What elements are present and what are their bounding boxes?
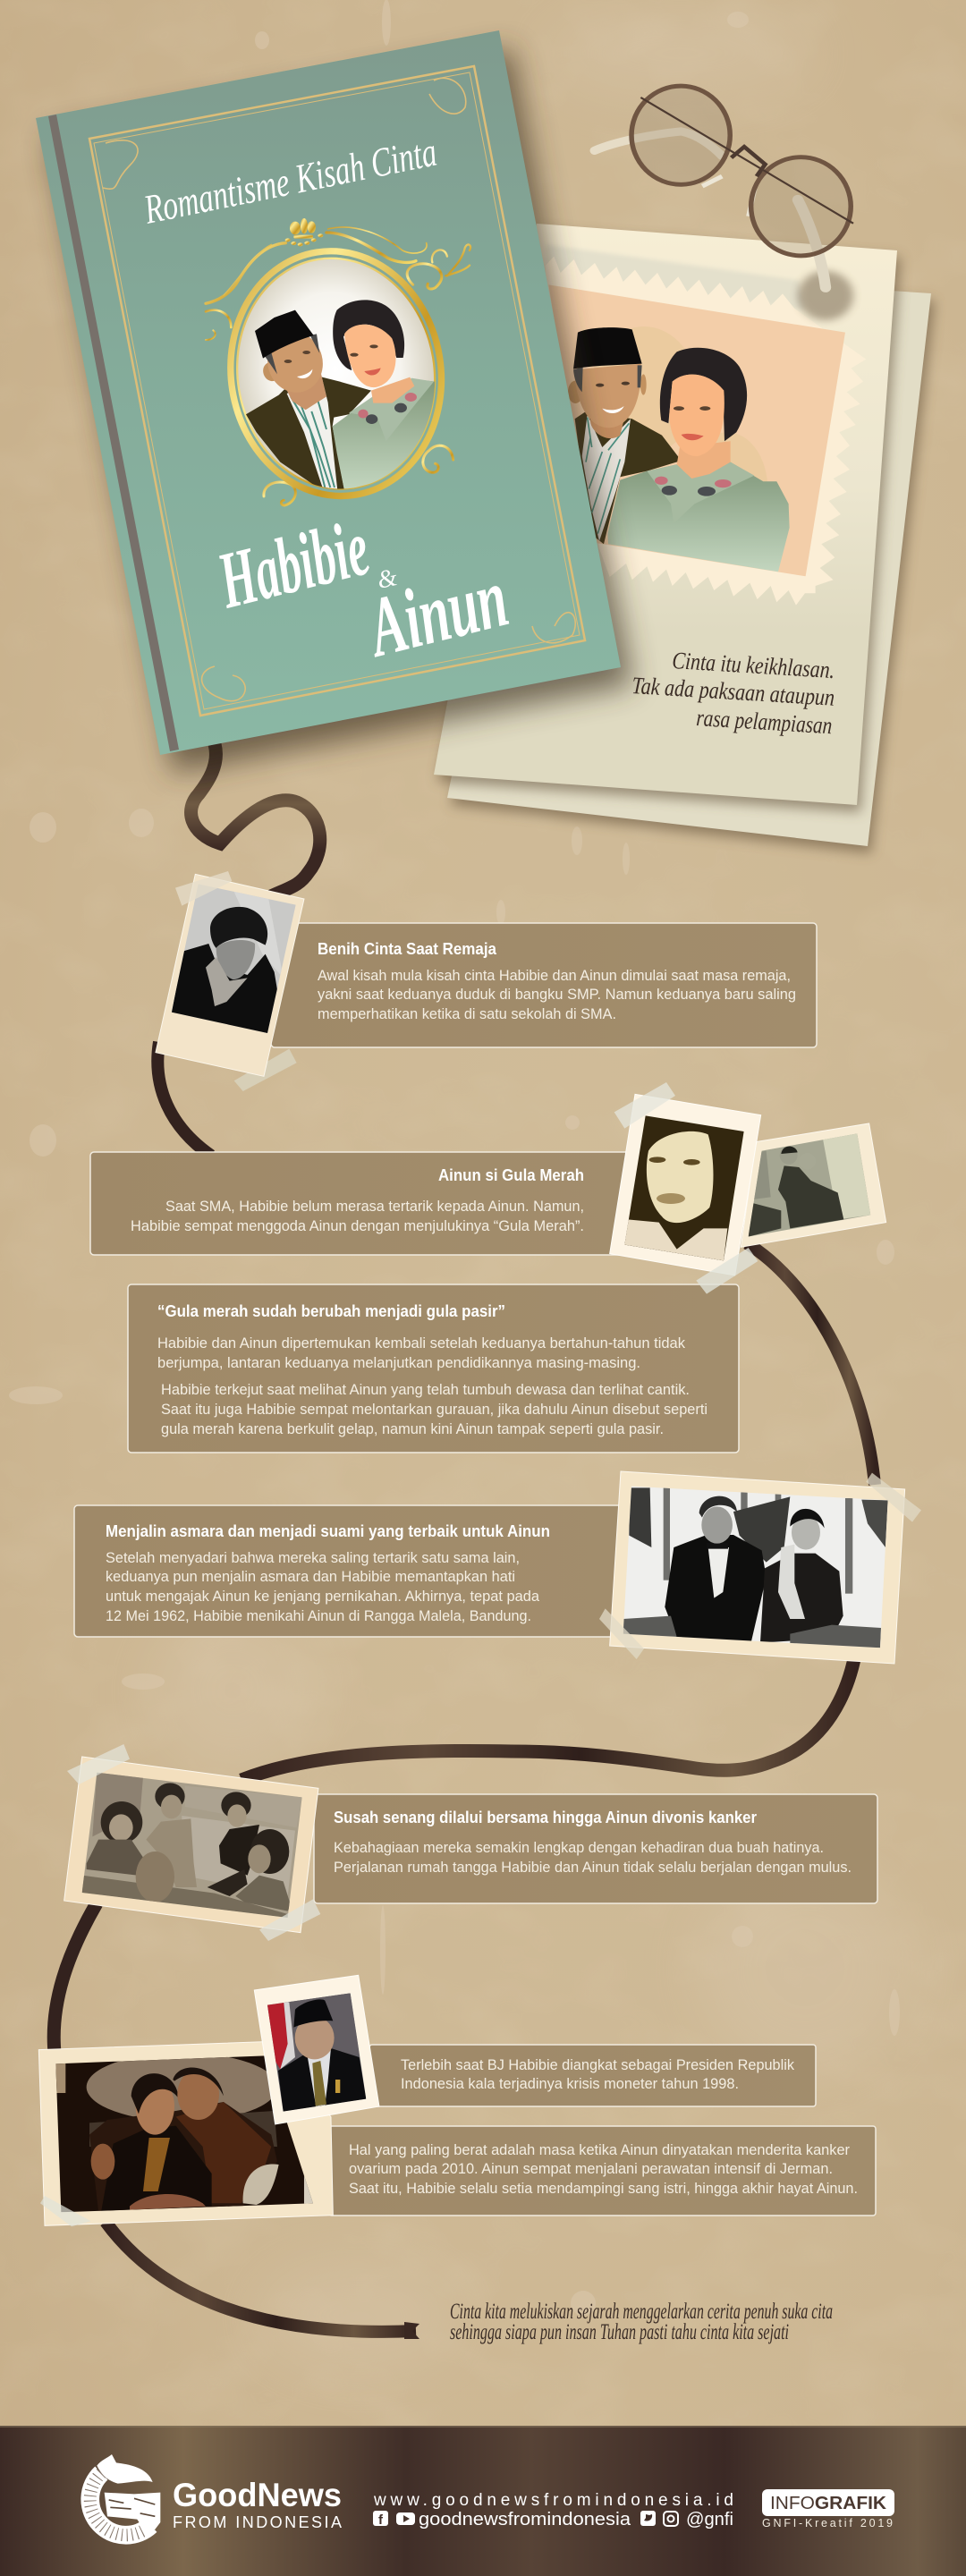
body text: Kebahagiaan mereka semakin lengkap dengan kehadiran dua buah hatinya. [334, 1840, 824, 1856]
heading: Susah senang dilalui bersama hingga Ainun divonis kanker [334, 1809, 757, 1826]
heading: Benih Cinta Saat Remaja [318, 940, 497, 958]
heading: Menjalin asmara dan menjadi suami yang terbaik untuk Ainun [106, 1522, 550, 1540]
website and social handles: www.goodnewsfromindonesia.id [373, 2491, 733, 2510]
gold frame [89, 66, 585, 716]
GoodNews logo emblem [90, 2454, 160, 2538]
closing script quote: sehingga siapa pun insan Tuhan pasti tahu cinta kita sejati [450, 2320, 789, 2344]
body text: Perjalanan rumah tangga Habibie dan Ainun tidak selalu berjalan dengan mulus. [334, 1860, 852, 1876]
footer band [0, 2426, 966, 2576]
handwritten quote on paper: Tak ada paksaan ataupun [631, 672, 835, 711]
book title: Romantisme Kisah Cinta [140, 129, 440, 233]
INFOGRAFIK badge [762, 2489, 894, 2529]
book [36, 30, 633, 773]
body text [318, 968, 796, 1022]
website and social handles [373, 2491, 733, 2529]
body text [106, 1550, 540, 1624]
ribbon bookmark timeline [54, 744, 875, 2339]
photo: small couple and young Ainun [610, 1082, 886, 1294]
crest [285, 218, 323, 246]
body text: Indonesia kala terjadinya krisis moneter tahun 1998. [401, 2076, 739, 2092]
book names: Ainun [356, 549, 516, 675]
book names: Habibie [209, 504, 377, 626]
glasses [595, 86, 853, 320]
panel: kanker ovarium [329, 2126, 876, 2216]
body text: Hal yang paling berat adalah masa ketika Ainun dinyatakan menderita kanker [349, 2142, 850, 2158]
body text [349, 2142, 858, 2197]
photo: wedding [599, 1471, 921, 1664]
photo: young Habibie [156, 871, 304, 1091]
heading: Ainun si Gula Merah [438, 1166, 584, 1184]
closing script quote [450, 2300, 833, 2344]
book names: & [375, 564, 400, 595]
body text: Habibie dan Ainun dipertemukan kembali setelah keduanya bertahun-tahun tidak [157, 1335, 686, 1352]
body text: memperhatikan ketika di satu sekolah di SMA. [318, 1006, 616, 1022]
body text [401, 2057, 795, 2092]
panel: Menjalin asmara [74, 1505, 623, 1637]
handwritten quote on paper [631, 647, 835, 739]
body text: Terlebih saat BJ Habibie diangkat sebagai Presiden Republik [401, 2057, 795, 2073]
body text: berjumpa, lantaran keduanya melanjutkan pendidikannya masing-masing. [157, 1355, 640, 1371]
INFOGRAFIK badge: GNFI-Kreatif 2019 [762, 2517, 893, 2529]
book names [209, 504, 516, 675]
GoodNews wordmark: GoodNews [173, 2477, 342, 2513]
panel: Presiden Republik Indonesia [369, 2045, 816, 2106]
handwritten quote on paper: Cinta itu keikhlasan. [672, 647, 835, 683]
panel: Benih Cinta Saat Remaja [271, 923, 817, 1047]
back sheet of paper [447, 268, 935, 853]
body text: untuk mengajak Ainun ke jenjang pernikahan. Akhirnya, tepat pada [106, 1589, 540, 1605]
body text: gula merah karena berkulit gelap, namun kini Ainun tampak seperti gula pasir. [161, 1421, 664, 1437]
front sheet with stamp photo [434, 224, 901, 812]
handwritten quote on paper: rasa pelampiasan [696, 704, 833, 739]
body text: keduanya pun menjalin asmara dan Habibie memantapkan hati [106, 1569, 515, 1585]
body text: Awal kisah mula kisah cinta Habibie dan Ainun dimulai saat masa remaja, [318, 968, 791, 984]
heading: “Gula merah sudah berubah menjadi gula pasir” [157, 1302, 505, 1320]
body text [157, 1335, 708, 1437]
body text: Setelah menyadari bahwa mereka saling tertarik satu sama lain, [106, 1550, 520, 1566]
website and social handles: goodnewsfromindonesia [419, 2510, 631, 2529]
body text: Saat SMA, Habibie belum merasa tertarik kepada Ainun. Namun, [165, 1199, 584, 1215]
body text: Saat itu, Habibie selalu setia mendampingi sang istri, hingga akhir hayat Ainun. [349, 2181, 858, 2197]
body text: Habibie sempat menggoda Ainun dengan menjulukinya “Gula Merah”. [131, 1218, 584, 1234]
body text: Habibie terkejut saat melihat Ainun yang telah tumbuh dewasa dan terlihat cantik. [161, 1382, 690, 1398]
body text: 12 Mei 1962, Habibie menikahi Ainun di Rangga Malela, Bandung. [106, 1608, 531, 1624]
panel: Susah senang [314, 1794, 877, 1903]
panel: Gula merah sudah berubah menjadi gula pasir [128, 1284, 739, 1453]
body text [334, 1840, 852, 1876]
stamp frame [546, 257, 866, 606]
website and social handles: f [378, 2512, 384, 2528]
INFOGRAFIK badge: INFOGRAFIK [770, 2494, 887, 2513]
photo: family [64, 1744, 320, 1941]
panel: Ainun si Gula Merah [90, 1152, 636, 1255]
photo: Habibie and Ainun in oval frame [38, 1975, 379, 2226]
body text: ovarium pada 2010. Ainun sempat menjalani perawatan intensif di Jerman. [349, 2161, 833, 2177]
stamp portrait: Habibie and Ainun [548, 284, 845, 576]
oval portrait with gold ornament [206, 218, 470, 512]
spine [48, 114, 179, 751]
GoodNews wordmark: FROM INDONESIA [173, 2513, 342, 2531]
GoodNews wordmark [173, 2477, 342, 2531]
body text: Saat itu juga Habibie sempat melontarkan gurauan, jika dahulu Ainun disebut seperti [161, 1402, 708, 1418]
website and social handles: @gnfi [686, 2510, 733, 2529]
body text: yakni saat keduanya duduk di bangku SMP. Namun keduanya baru saling [318, 987, 796, 1003]
body text [131, 1199, 584, 1234]
